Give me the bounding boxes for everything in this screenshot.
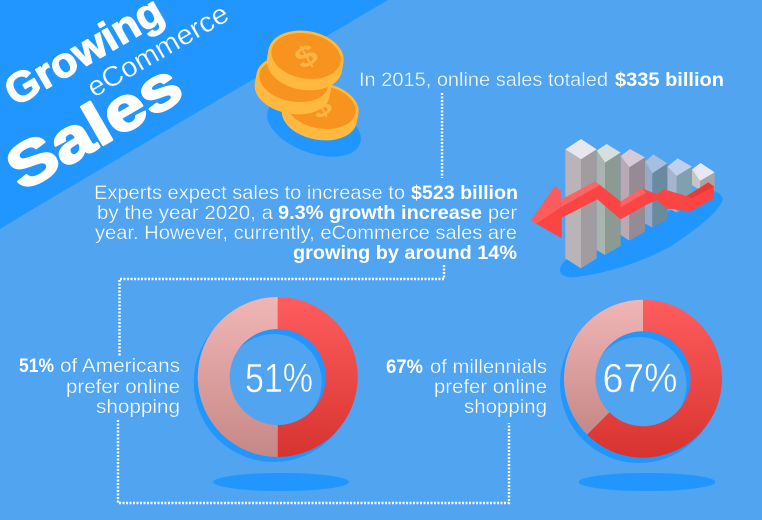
- text: 2015 sales: $335 billion: [615, 69, 724, 91]
- connector: dotted lines: [118, 93, 509, 503]
- text: 51% of Americans: [19, 355, 180, 418]
- title: [0, 0, 234, 203]
- text: expert forecast: [94, 182, 518, 264]
- text: 67% of millennials: [386, 356, 547, 418]
- text: 67% of millennials: shopping: [464, 396, 547, 418]
- text: expert forecast: by the year 2020, a: [97, 202, 273, 224]
- donut chart: 51%: [194, 297, 358, 491]
- text: expert forecast: Experts expect sales to increase to: [94, 182, 405, 204]
- text: 2015 sales: In 2015, online sales totaled: [359, 69, 608, 91]
- label: 67%: 67%: [602, 355, 678, 401]
- label: 51%: 51%: [245, 355, 313, 401]
- text: 51% of Americans: 51%: [19, 355, 54, 377]
- text: expert forecast: $523 billion: [411, 182, 518, 204]
- text: 67% of millennials: prefer online: [434, 376, 547, 398]
- text: 67% of millennials: 67%: [386, 356, 423, 378]
- icon: bar chart with falling arrow: [531, 139, 723, 277]
- title banner: [0, 0, 388, 229]
- coin: bottom: [278, 77, 363, 146]
- text: expert forecast: 9.3% growth increase: [278, 202, 482, 224]
- coin: top: [263, 25, 348, 96]
- text: 51% of Americans: of Americans: [60, 355, 180, 377]
- title: eCommerce: eCommerce: [82, 0, 234, 103]
- text: expert forecast: per: [488, 202, 518, 224]
- text: expert forecast: growing by around 14%: [293, 242, 517, 264]
- text: 51% of Americans: shopping: [96, 396, 180, 418]
- coin: middle: [251, 50, 336, 120]
- coin: bottom: $: [305, 89, 337, 125]
- coin: top: $: [289, 37, 324, 76]
- text: 51% of Americans: prefer online: [66, 376, 180, 398]
- text: expert forecast: year. However, currently, eCommerce sales are: [95, 222, 517, 244]
- icon: coins: [251, 25, 369, 168]
- donut chart: 67%: [560, 300, 722, 491]
- text: 67% of millennials: of millennials: [430, 356, 547, 378]
